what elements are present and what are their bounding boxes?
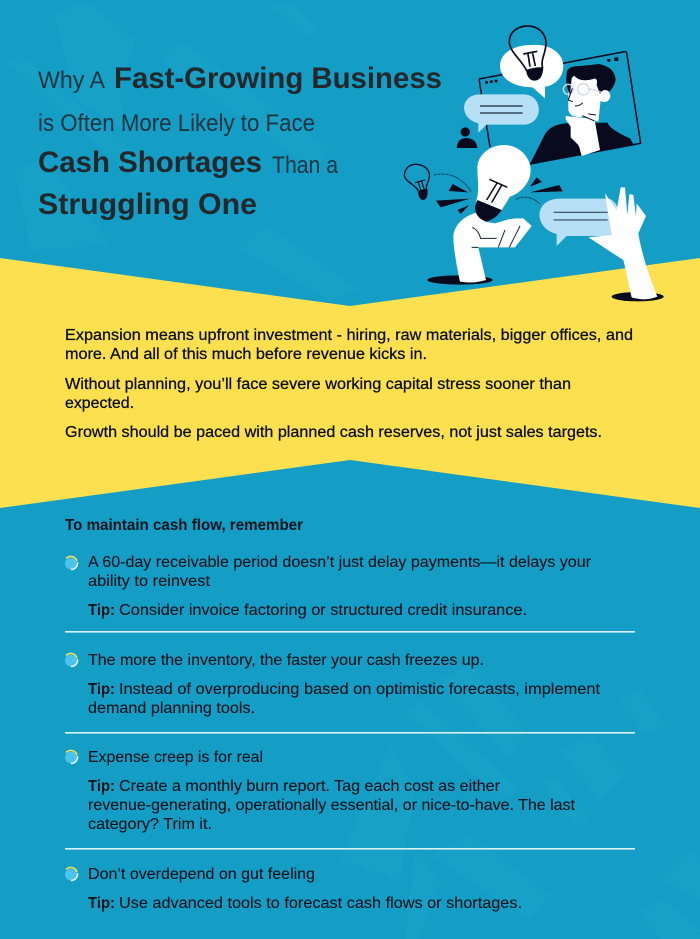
icon: blue chat bubble top <box>464 94 539 133</box>
bullet <box>65 750 78 764</box>
icons and bubbles at zoom scale <box>404 26 563 214</box>
icon: window dots <box>485 79 498 84</box>
item 3 text: Expense creep is for real <box>88 749 263 766</box>
item 3 tip: category? Trim it. <box>88 816 212 833</box>
item 4 text: Don’t overdepend on gut feeling <box>88 866 315 883</box>
item 2 tip <box>88 681 601 717</box>
paragraph: expansion <box>65 327 633 363</box>
icon: hand holding lit bulb <box>427 145 532 285</box>
item 4 tip: Tip: <box>88 895 115 912</box>
paragraph: expansion: more. And all of this much before revenue kicks in. <box>65 346 427 363</box>
icon: person <box>457 127 477 148</box>
yellow band <box>0 258 700 508</box>
item 3 tip: revenue-generating, operationally essential, or nice-to-have. The last <box>88 797 576 814</box>
intro text block <box>65 327 633 441</box>
video call panel <box>479 52 641 164</box>
icon: small bulb <box>404 164 429 200</box>
item 4 tip: Use advanced tools to forecast cash flows or shortages. <box>119 895 522 912</box>
paragraph: expansion: Expansion means upfront investment - hiring, raw materials, bigger offices, and <box>65 327 633 344</box>
item 1: receivables <box>65 554 592 619</box>
item 2 tip: Instead of overproducing based on optimistic forecasts, implement <box>119 681 601 698</box>
title line 3: Than a <box>272 152 339 179</box>
title <box>38 62 442 221</box>
icon: spark lines <box>434 174 563 214</box>
item 1 text: A 60-day receivable period doesn’t just delay payments—it delays your <box>88 554 592 571</box>
paragraph: planning: expected. <box>65 395 134 412</box>
paragraph: planning <box>65 376 571 412</box>
bullet <box>65 653 78 667</box>
title line 4: Struggling One <box>38 188 257 221</box>
icon: raised hand <box>588 187 664 301</box>
paragraph: growth: Growth should be paced with planned cash reserves, not just sales targets. <box>65 424 602 441</box>
title line 1: Why A <box>38 67 105 94</box>
bullet <box>65 867 78 881</box>
item 1 tip: Tip: <box>88 602 115 619</box>
item 3 tip: Create a monthly burn report. Tag each cost as either <box>119 778 501 795</box>
item 2 tip: Tip: <box>88 681 115 698</box>
item 3: expense creep <box>65 749 576 833</box>
icon: thinking man <box>530 64 633 164</box>
title line 2: is Often More Likely to Face <box>38 110 315 137</box>
item 1 text: ability to reinvest <box>88 573 211 590</box>
item 2 text: The more the inventory, the faster your cash freezes up. <box>88 652 484 669</box>
item 2 tip: demand planning tools. <box>88 700 255 717</box>
list heading: To maintain cash flow, remember <box>65 517 303 534</box>
item 1 tip: Consider invoice factoring or structured credit insurance. <box>119 602 527 619</box>
item 1 text <box>88 554 592 590</box>
paragraph: planning: Without planning, you’ll face severe working capital stress sooner than <box>65 376 571 393</box>
illustration: ideas and video call <box>404 26 664 301</box>
item 4: gut feeling <box>65 866 522 912</box>
title line 1: Fast-Growing Business <box>114 62 442 95</box>
icon: video window <box>479 52 641 164</box>
icon: white speech bubble with bulb <box>500 26 563 98</box>
title line 3: Cash Shortages <box>38 146 262 179</box>
item 3 tip: Tip: <box>88 778 115 795</box>
icon: window controls <box>607 57 618 62</box>
item 2: inventory <box>65 652 601 717</box>
bullet <box>65 556 78 570</box>
icon: blue chat bubble bottom <box>540 199 619 246</box>
item 3 tip <box>88 778 576 833</box>
